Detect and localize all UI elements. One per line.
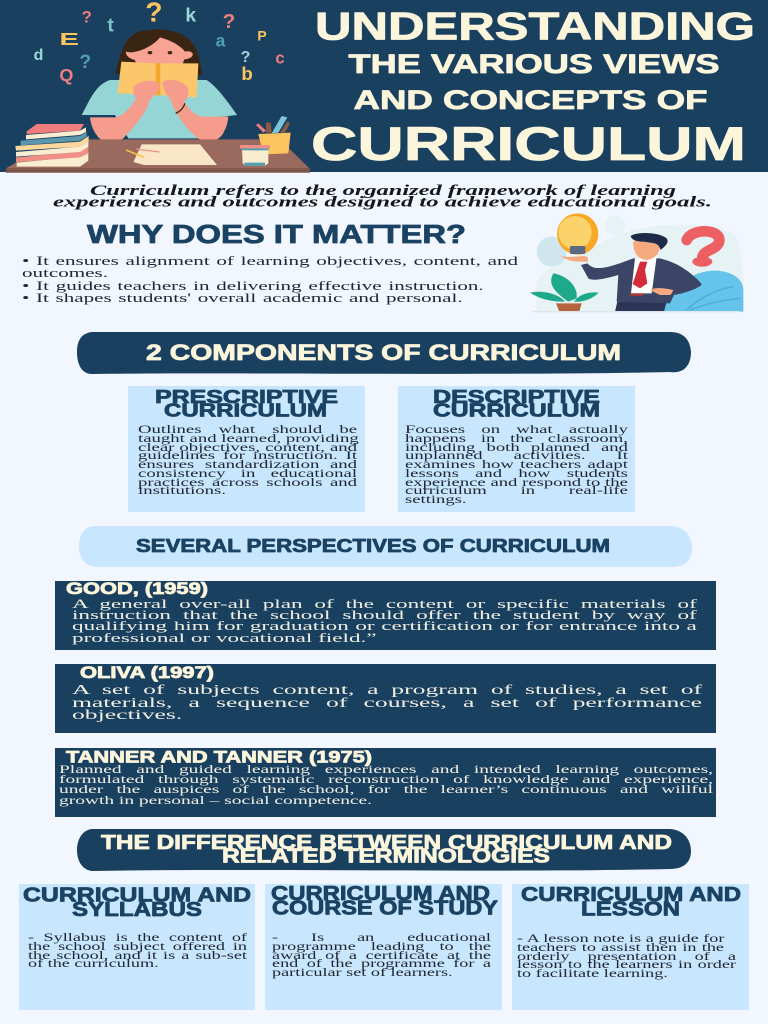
body text: lessons and how students xyxy=(405,468,628,480)
definition text: growth in personal – social competence. xyxy=(59,795,372,807)
body text: Outlines what should be xyxy=(138,424,357,436)
body text: lesson to the learners in order xyxy=(517,959,736,971)
title xyxy=(311,6,755,170)
definition text: A set of subjects content, a program of studies, a set of xyxy=(72,683,702,698)
body text xyxy=(272,934,494,982)
body text: the school subject offered in xyxy=(28,941,247,953)
icon: floating letters and question marks xyxy=(34,0,285,85)
icon: floating letters and question marks: k xyxy=(185,5,196,26)
body text: guidelines for instruction. It xyxy=(138,450,357,462)
body text: unplanned activities. It xyxy=(405,450,628,462)
body text: institutions. xyxy=(138,485,226,497)
icon: floating letters and question marks: ? xyxy=(223,10,235,33)
heading: Tanner: TANNER AND TANNER (1975) xyxy=(66,748,372,766)
heading: Good: GOOD, (1959) xyxy=(66,580,208,598)
body text: experience and respond to the xyxy=(405,476,628,488)
body text: end of the programme for a xyxy=(272,958,491,970)
title: UNDERSTANDING xyxy=(315,6,755,48)
icon: floating letters and question marks: b xyxy=(241,63,253,84)
body text: - Is an educational xyxy=(272,932,491,944)
title: AND CONCEPTS OF xyxy=(354,85,708,115)
coffee cup xyxy=(240,145,270,166)
definition text xyxy=(72,685,706,727)
heading: descriptive xyxy=(433,386,600,420)
heading: prescriptive: CURRICULUM xyxy=(164,400,327,420)
trousers xyxy=(615,302,667,312)
illustration: businessman with lightbulb and question mark xyxy=(530,213,743,312)
pencil cup xyxy=(256,116,291,154)
heading: syllabus: CURRICULUM AND xyxy=(23,884,251,906)
bullet list: • It ensures alignment of learning objectives, content, and xyxy=(22,253,518,268)
body text xyxy=(517,935,739,983)
panel: curriculum and course of study xyxy=(265,883,502,1010)
body text: of the curriculum. xyxy=(28,958,159,970)
bullet list: • It shapes students' overall academic and personal. xyxy=(22,290,463,305)
hand xyxy=(561,256,588,262)
icon: floating letters and question marks: Q xyxy=(59,65,73,85)
light bulb xyxy=(557,213,598,255)
panel: Tanner and Tanner 1975 xyxy=(55,748,717,817)
heading: prescriptive: PRESCRIPTIVE xyxy=(155,386,338,407)
body text: particular set of learners. xyxy=(272,967,453,979)
hair xyxy=(115,29,202,75)
plant xyxy=(530,273,599,311)
heading: syllabus: SYLLABUS xyxy=(72,899,202,921)
definition text: professional or vocational field.” xyxy=(72,630,377,645)
body text: ensures standardization and xyxy=(138,459,357,471)
intro text: experiences and outcomes designed to achieve educational goals. xyxy=(53,194,712,210)
body text: to facilitate learning. xyxy=(517,968,668,980)
face xyxy=(126,37,193,67)
book xyxy=(118,62,198,97)
pill heading: the difference xyxy=(77,829,691,871)
heading: course of study: COURSE OF STUDY xyxy=(272,898,499,920)
definition text xyxy=(59,764,717,808)
suit jacket xyxy=(581,258,702,303)
pill heading: several perspectives: SEVERAL PERSPECTIVES OF CURRICULUM xyxy=(136,536,610,556)
definition text: A general over-all plan of the content or specific materials of xyxy=(72,596,697,610)
arms xyxy=(90,97,150,142)
hand on hip xyxy=(650,288,673,295)
body text: settings. xyxy=(405,494,467,506)
heading: syllabus xyxy=(23,884,251,921)
icon: floating letters and question marks: E xyxy=(59,29,79,49)
title: THE VARIOUS VIEWS xyxy=(348,49,720,79)
definition text: Planned and guided learning experiences and intended learning outcomes, xyxy=(59,764,713,776)
panel: prescriptive curriculum xyxy=(128,386,365,512)
icon: floating letters and question marks: P xyxy=(257,27,267,43)
bullet list: • It guides teachers in delivering effective instruction. xyxy=(22,278,484,293)
stack of books xyxy=(15,124,89,167)
heading: course of study xyxy=(271,883,499,920)
body text xyxy=(28,934,250,974)
heading: descriptive: CURRICULUM xyxy=(433,400,600,420)
shirt and tie xyxy=(630,257,657,296)
panel: curriculum and lesson xyxy=(512,884,749,1010)
body text: programme leading to the xyxy=(272,941,491,953)
panel: descriptive curriculum xyxy=(398,386,635,512)
icon: floating letters and question marks: d xyxy=(34,47,43,64)
head xyxy=(633,239,660,260)
icon: floating letters and question marks: ? xyxy=(82,8,92,27)
bullet list: outcomes. xyxy=(22,265,108,280)
hands xyxy=(133,81,160,105)
body text: the school, and it is a sub-set xyxy=(28,950,247,962)
heading: why does it matter: WHY DOES IT MATTER? xyxy=(87,219,466,249)
panel: Oliva 1997 xyxy=(55,664,716,733)
intro text: Curriculum refers to the organized framework of learning xyxy=(90,183,676,199)
body text: - Syllabus is the content of xyxy=(28,932,247,944)
desk xyxy=(6,139,309,173)
shirt xyxy=(82,80,237,138)
body text: teachers to assist then in the xyxy=(517,942,724,954)
pill heading: the difference: THE DIFFERENCE BETWEEN CURRICULUM AND xyxy=(101,832,672,854)
header banner xyxy=(0,0,768,173)
icon: floating letters and question marks: c xyxy=(275,48,285,67)
panel: curriculum and syllabus xyxy=(19,884,255,1010)
icon: floating letters and question marks: a xyxy=(216,31,226,51)
definition text: instruction that the school should offer the student by way of xyxy=(72,607,697,622)
body text xyxy=(405,426,631,510)
icon: floating letters and question marks: ? xyxy=(79,52,91,73)
pill heading: 2 components: 2 COMPONENTS OF CURRICULUM xyxy=(146,340,621,365)
pill heading: the difference: RELATED TERMINOLOGIES xyxy=(222,846,550,868)
question mark xyxy=(687,231,719,267)
bullet list xyxy=(22,255,522,307)
icon: floating letters and question marks: t xyxy=(107,16,114,37)
body text: curriculum in real-life xyxy=(405,485,628,497)
body text: including both planned and xyxy=(405,442,628,454)
heading: lesson: LESSON xyxy=(581,898,680,920)
definition text xyxy=(72,598,702,648)
icon: floating letters and question marks: ? xyxy=(241,49,250,66)
definition text: formulated through systematic reconstruction of knowledge and experience, xyxy=(59,774,713,786)
pill heading: 2 components xyxy=(77,332,691,374)
heading: course of study: CURRICULUM AND xyxy=(271,883,490,905)
panel: Good 1959 xyxy=(55,580,716,650)
definition text: objectives. xyxy=(72,708,182,723)
title: CURRICULUM xyxy=(311,117,746,170)
body text: consistency in educational xyxy=(138,468,357,480)
body text: clear objectives, content, and xyxy=(138,442,357,454)
body text: examines how teachers adapt xyxy=(405,459,628,471)
blue leaf xyxy=(663,271,743,312)
body text: award of a certificate at the xyxy=(272,950,491,962)
pill heading: several perspectives xyxy=(79,526,692,567)
body text: Focuses on what actually xyxy=(405,424,628,436)
definition text: under the auspices of the school, for the learner’s continuous and willful xyxy=(59,784,713,796)
heading: lesson xyxy=(521,884,741,920)
body text: orderly presentation of a xyxy=(517,950,736,962)
body text: taught and learned, providing xyxy=(138,433,359,445)
heading: lesson: CURRICULUM AND xyxy=(521,884,741,906)
body text: happens in the classroom, xyxy=(405,433,628,445)
definition text: qualifying him for graduation or certification or for entrance into a xyxy=(72,618,697,633)
body text xyxy=(138,426,360,501)
heading: descriptive: DESCRIPTIVE xyxy=(433,386,600,407)
body text: practices across schools and xyxy=(138,476,357,488)
definition text: materials, a sequence of courses, a set of performance xyxy=(72,696,702,711)
intro text xyxy=(53,183,712,210)
heading: Oliva: OLIVA (1997) xyxy=(80,664,214,682)
illustration: student reading behind desk xyxy=(6,0,310,173)
heading: prescriptive xyxy=(155,386,338,420)
paper and pencil xyxy=(133,144,217,165)
body text: - A lesson note is a guide for xyxy=(517,933,724,945)
